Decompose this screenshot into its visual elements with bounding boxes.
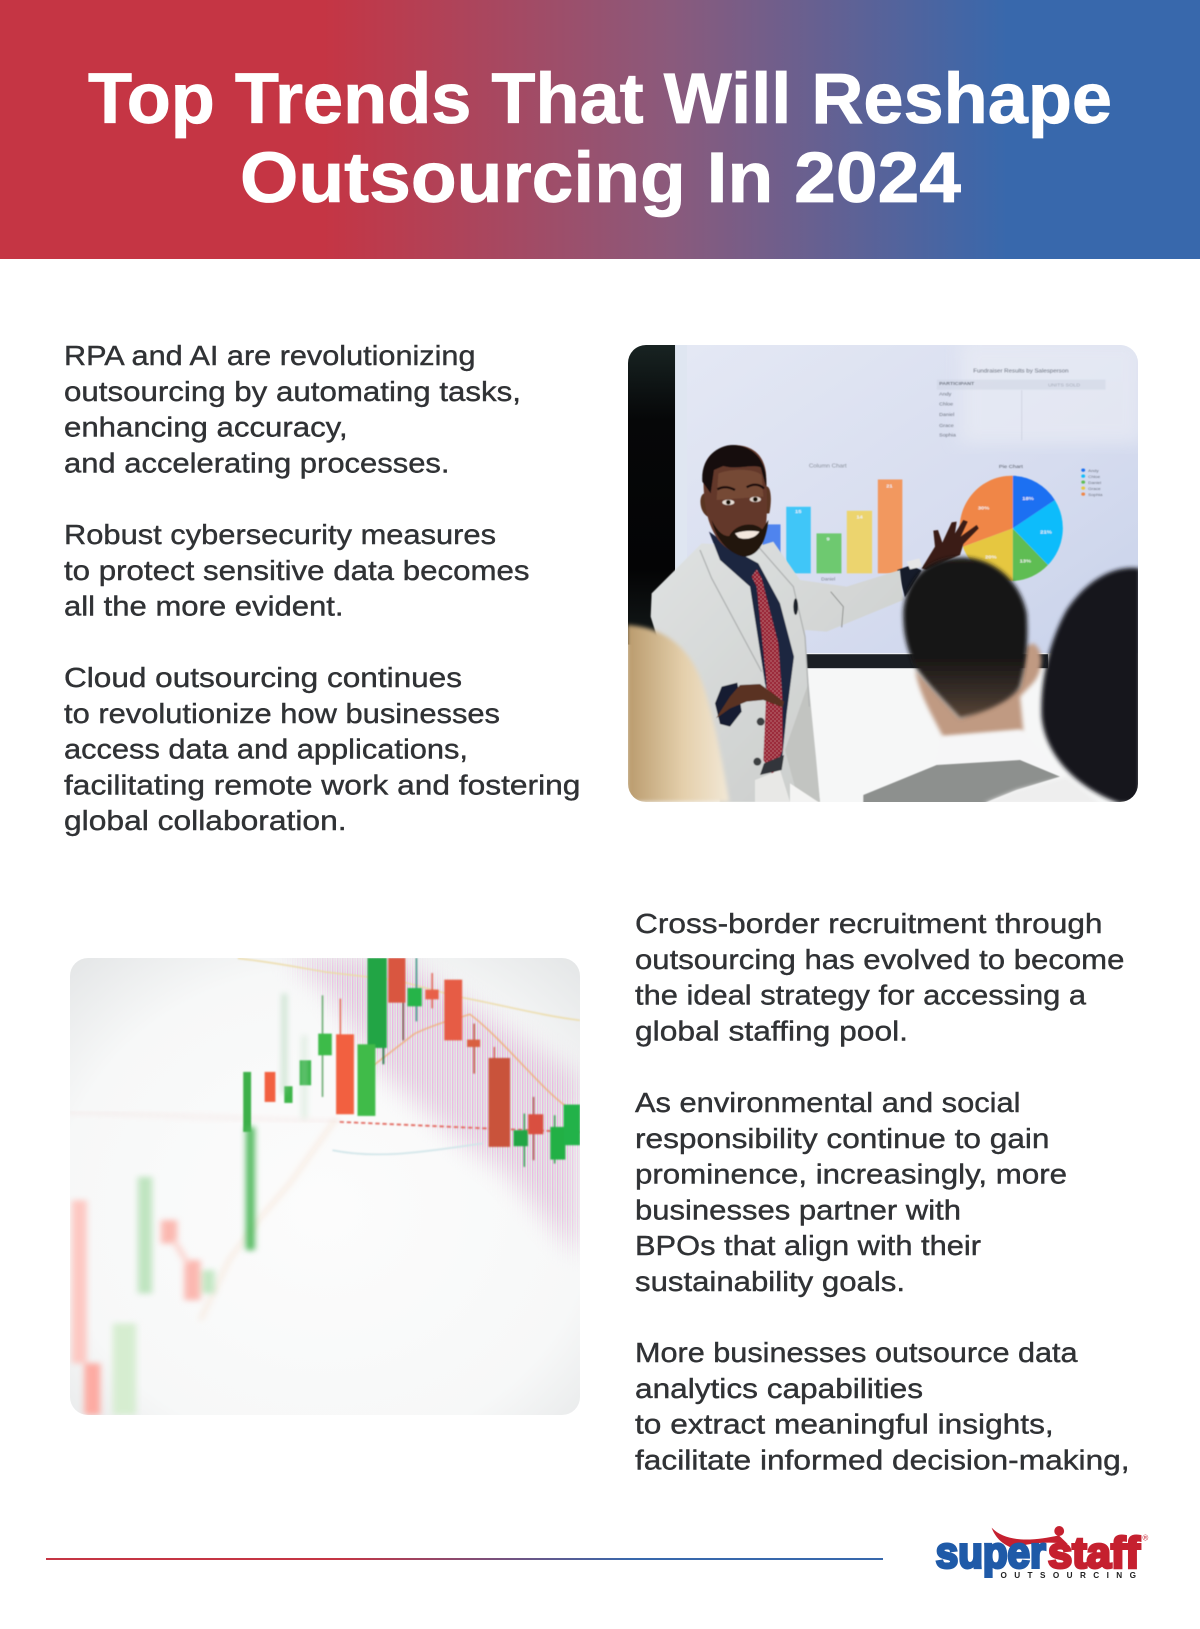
header banner — [0, 0, 1200, 259]
on-screen table: PARTICIPANT — [939, 381, 975, 387]
on-screen pie chart: 30% — [978, 506, 990, 511]
text block: cross-border recruitment: Cross-border recruitment through — [635, 908, 1102, 939]
text block: cloud outsourcing: facilitating remote work and fostering — [64, 769, 580, 800]
audience: blonde hair — [627, 625, 729, 802]
text block: environmental and social responsibility: sustainability goals. — [635, 1266, 905, 1296]
presenter — [651, 445, 903, 802]
text block: environmental and social responsibility: businesses partner with — [635, 1194, 961, 1225]
text block: RPA and AI: enhancing accuracy, — [64, 412, 348, 443]
text block: environmental and social responsibility: responsibility continue to gain — [635, 1122, 1050, 1153]
logo: SuperStaff Outsourcing — [935, 1526, 1149, 1580]
on-screen pie chart: 21% — [1040, 530, 1052, 535]
text block: data analytics — [635, 1336, 1130, 1476]
text block: RPA and AI: outsourcing by automating tasks, — [64, 376, 521, 407]
on-screen column chart: 21 — [886, 484, 893, 489]
text block: environmental and social responsibility: As environmental and social — [635, 1086, 1020, 1118]
on-screen table: Chloe — [939, 402, 953, 407]
footer gradient rule — [46, 1558, 883, 1560]
logo swoosh — [992, 1526, 1068, 1548]
text block: cybersecurity — [64, 519, 530, 622]
on-screen pie chart: Grace — [1088, 486, 1101, 491]
text block: environmental and social responsibility: prominence, increasingly, more — [635, 1158, 1067, 1189]
on-screen pie chart: Daniel — [1088, 480, 1101, 485]
sharp candlesticks — [243, 958, 580, 1167]
audience: right dark hair — [1041, 568, 1140, 803]
text block: cybersecurity: all the more evident. — [64, 591, 344, 622]
title: Top Trends That Will Reshape — [88, 60, 1112, 139]
photo: candlestick chart on screen — [70, 958, 580, 1415]
on-screen table: UNITS SOLD — [1048, 383, 1080, 388]
on-screen table: Fundraiser Results by Salesperson — [973, 369, 1069, 374]
on-screen pie chart: Pie Chart — [999, 464, 1023, 470]
title: Outsourcing In 2024 — [240, 139, 962, 218]
moire band — [287, 958, 580, 1256]
on-screen table: Daniel — [939, 413, 954, 418]
on-screen column chart: Daniel — [821, 577, 835, 582]
moving-average lines — [70, 958, 580, 1320]
text block: data analytics: More businesses outsource data — [635, 1336, 1078, 1368]
audience: dark-haired man — [863, 557, 1100, 803]
on-screen column chart: 15 — [795, 509, 801, 515]
text block: cybersecurity: to protect sensitive data becomes — [64, 555, 530, 586]
on-screen column chart: 14 — [856, 515, 863, 520]
on-screen pie chart: Chloe — [1088, 474, 1101, 479]
blurred candlesticks — [72, 994, 305, 1415]
text block: data analytics: analytics capabilities — [635, 1372, 923, 1403]
text block: cloud outsourcing: Cloud outsourcing continues — [64, 662, 462, 693]
logo tagline: OUTSOURCING — [1000, 1571, 1136, 1580]
text block: cloud outsourcing — [64, 662, 580, 836]
logo registered mark: ® — [1143, 1533, 1149, 1542]
on-screen pie chart: 18% — [1022, 496, 1034, 502]
text block: cross-border recruitment: the ideal strategy for accessing a — [635, 980, 1086, 1011]
logo wordmark: staff — [1048, 1529, 1141, 1577]
on-screen table: Sophia — [939, 433, 956, 438]
logo wordmark: super — [936, 1529, 1046, 1577]
text block: cross-border recruitment: outsourcing has evolved to become — [635, 944, 1124, 975]
on-screen table: Andy — [939, 392, 952, 397]
text block: cloud outsourcing: to revolutionize how businesses — [64, 697, 500, 728]
text block: data analytics: to extract meaningful insights, — [635, 1408, 1054, 1439]
on-screen column chart: Column Chart — [809, 464, 847, 469]
on-screen pie chart: 20% — [985, 555, 997, 561]
photo: presenter at a chart screen — [628, 345, 1138, 802]
text block: RPA and AI: RPA and AI are revolutionizing — [64, 340, 476, 371]
logo wordmark — [936, 1529, 1141, 1577]
on-screen pie chart: Andy — [1088, 468, 1100, 473]
text block: data analytics: facilitate informed decision-making, — [635, 1444, 1130, 1475]
text block: environmental and social responsibility — [634, 1086, 1067, 1298]
raised hand and cuff — [897, 520, 979, 597]
text block: cross-border recruitment — [635, 908, 1124, 1047]
on-screen table: Grace — [939, 423, 954, 429]
on-screen table — [937, 369, 1105, 440]
text block: cybersecurity: Robust cybersecurity measures — [64, 519, 496, 550]
on-screen column chart — [762, 464, 902, 582]
text block: cloud outsourcing: global collaboration. — [64, 805, 347, 836]
text block: RPA and AI — [64, 340, 521, 479]
text block: cross-border recruitment: global staffing pool. — [635, 1015, 908, 1046]
title — [88, 60, 1112, 218]
text block: cloud outsourcing: access data and applications, — [64, 733, 468, 764]
on-screen pie chart: Sophia — [1088, 492, 1103, 497]
room and screen — [628, 345, 1138, 802]
on-screen pie chart: 13% — [1020, 559, 1031, 565]
on-screen pie chart — [960, 464, 1103, 581]
text block: RPA and AI: and accelerating processes. — [64, 447, 450, 478]
chart background — [70, 958, 580, 1415]
on-screen column chart: 9 — [826, 537, 830, 543]
text block: environmental and social responsibility: BPOs that align with their — [635, 1230, 981, 1261]
